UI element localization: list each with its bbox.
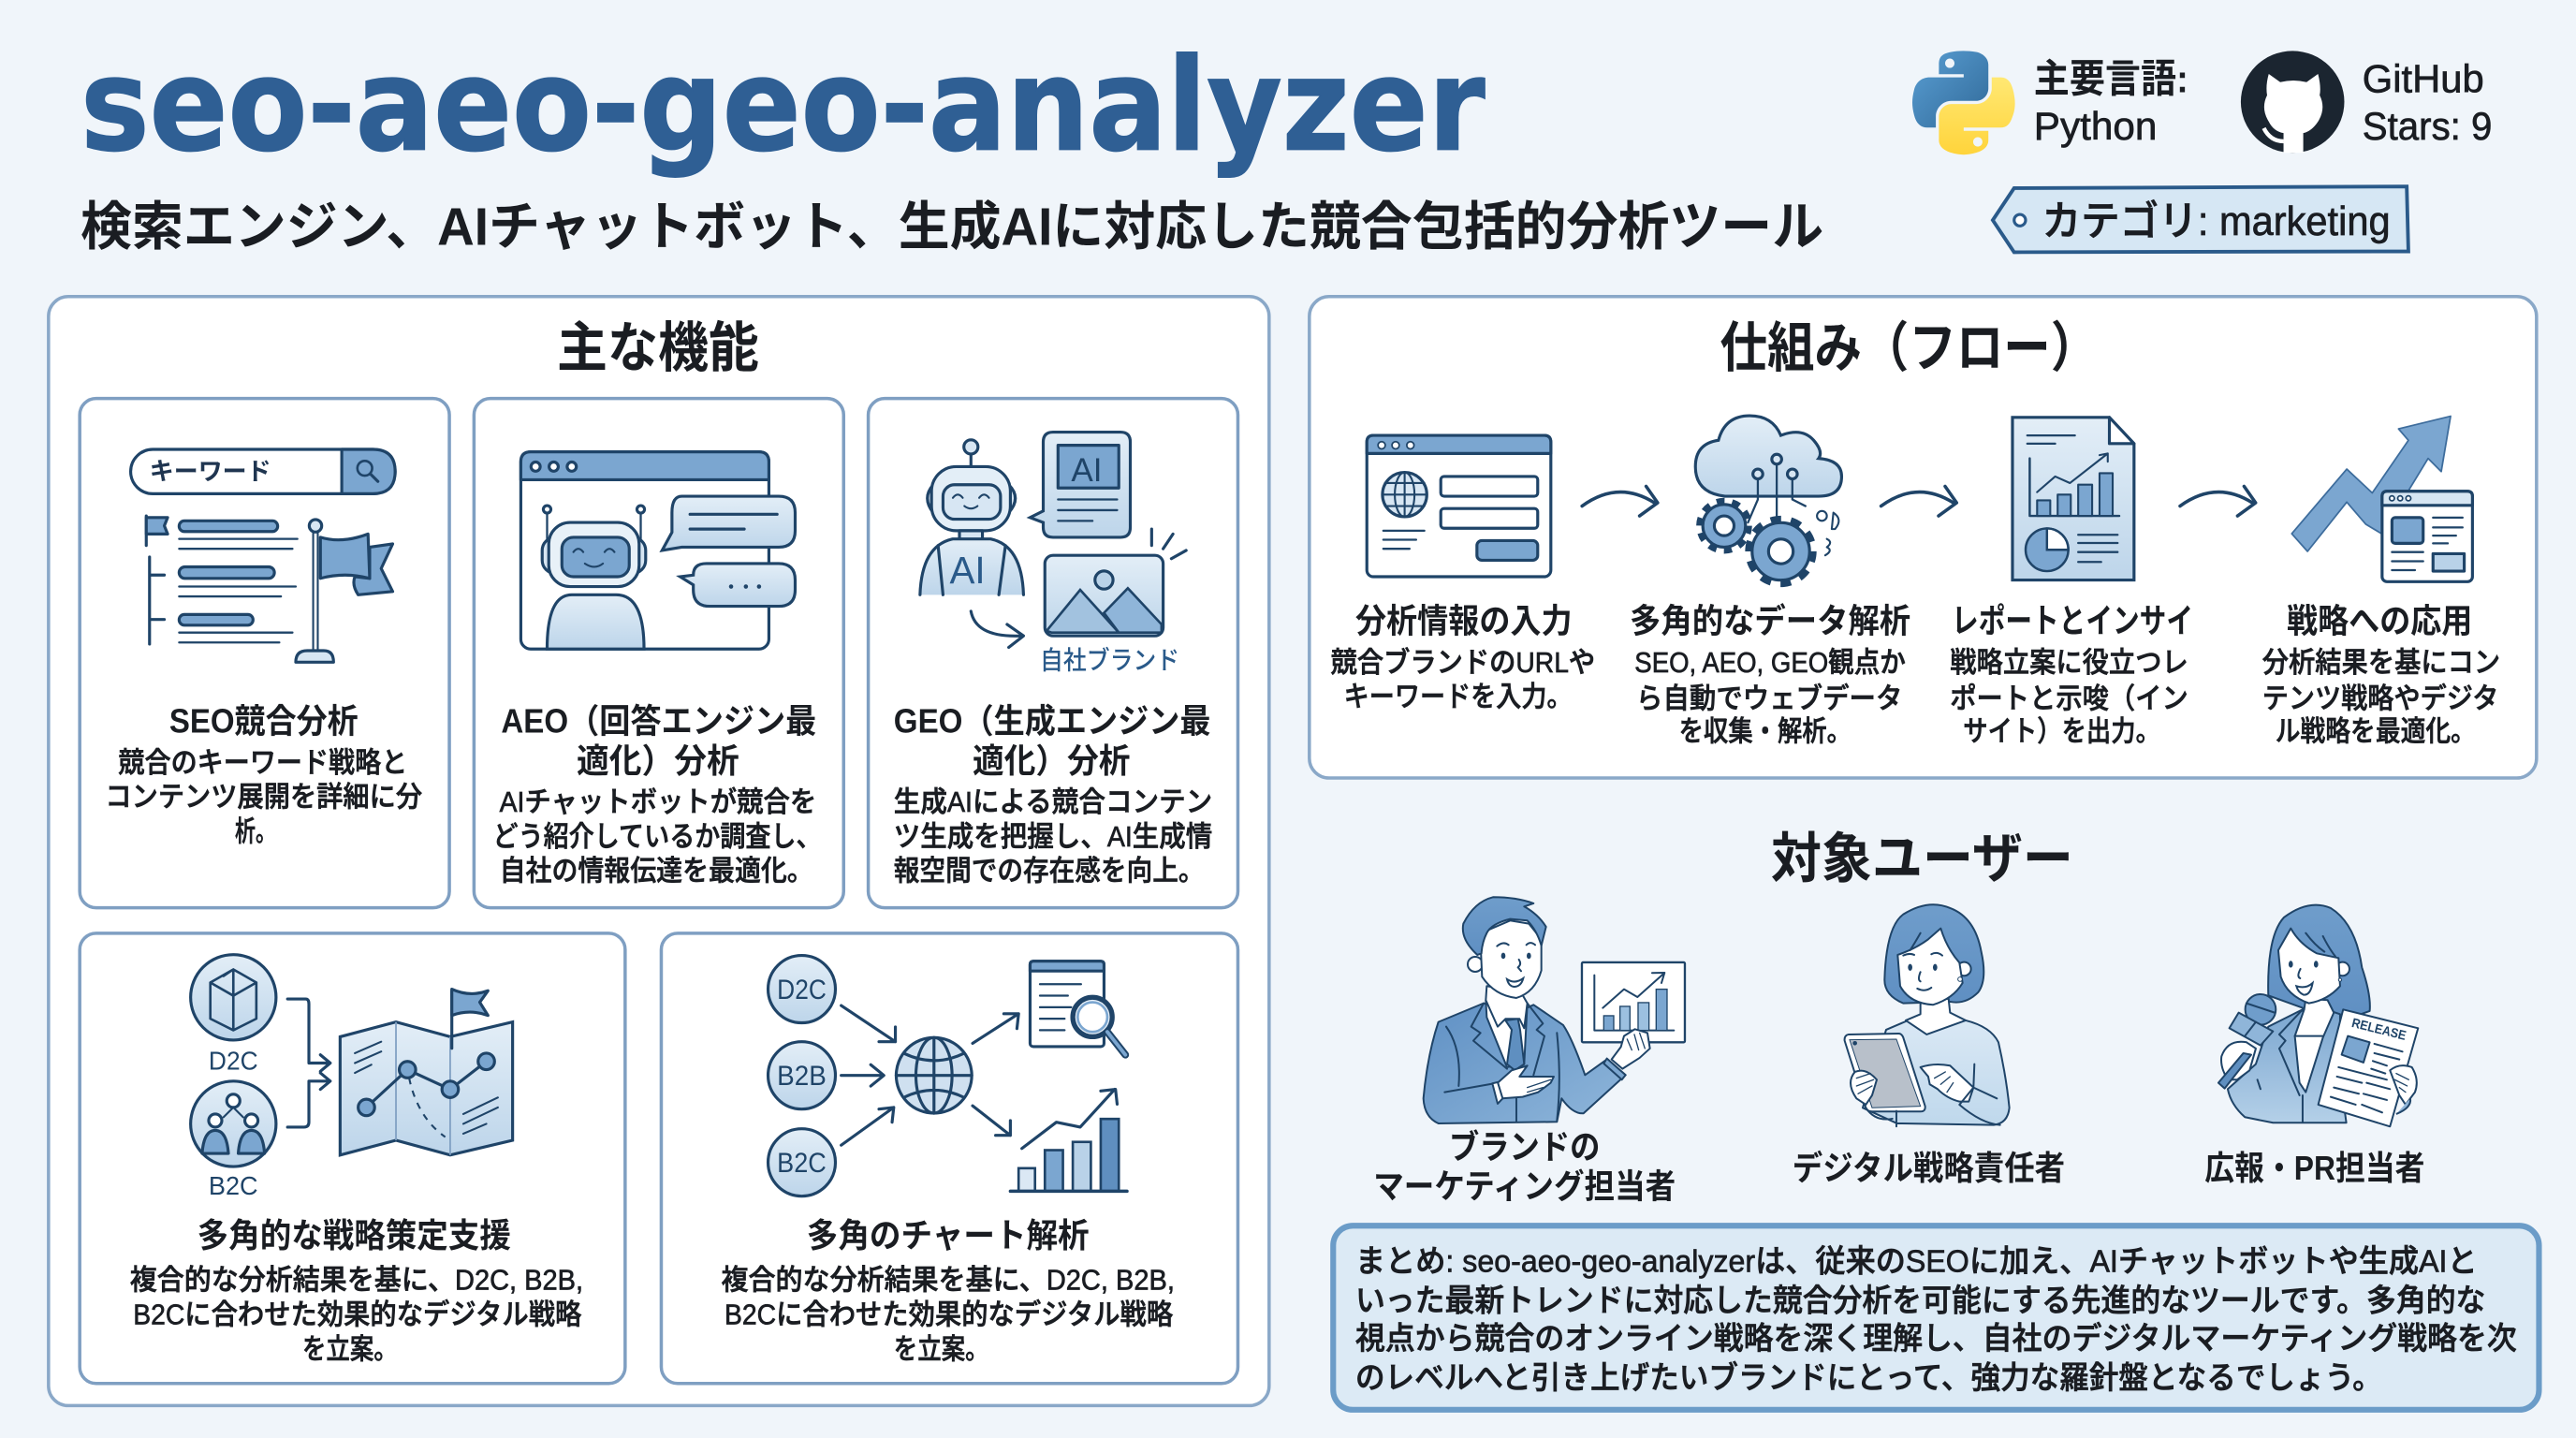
card title: [894, 702, 1211, 780]
card text: を立案。: [302, 1332, 398, 1365]
icon: pr woman with microphone and press release: RELEASE: [2350, 1015, 2408, 1043]
card: strategy: [80, 933, 625, 1384]
card: geo: [869, 399, 1237, 908]
step 1 text: 分析情報の入力: [1355, 602, 1573, 640]
icon: cloud data analysis: [1695, 416, 1841, 581]
icon: segments to globe to charts: B2C: [777, 1148, 827, 1179]
card title: [501, 702, 816, 780]
icon: generative ai robot and brand image: AI: [949, 549, 986, 592]
card text: 析。: [235, 815, 276, 848]
user label: marketer: [1373, 1127, 1676, 1205]
step 3 text: ポートと示唆（イン: [1950, 682, 2188, 714]
icon: digital strategy woman with tablet: [1845, 904, 2010, 1126]
category tag: カテゴリ: marketing: [2042, 198, 2391, 244]
category tag: [1993, 186, 2408, 252]
icon: segments to globe to charts: D2C: [777, 975, 827, 1005]
heading: flow: 仕組み（フロー）: [1720, 318, 2098, 378]
card title: 多角的な戦略策定支援: [198, 1216, 511, 1255]
card title: 適化）分析: [973, 741, 1131, 780]
card text: 自社の情報伝達を最適化。: [500, 855, 813, 888]
step 2 text: ら自動でウェブデータ: [1636, 682, 1902, 714]
icon: python logo: [1912, 51, 2015, 154]
user label: pr: 広報・PR担当者: [2204, 1149, 2424, 1187]
heading: target users: 対象ユーザー: [1771, 829, 2073, 889]
language label: Python: [2034, 104, 2157, 148]
card title: 多角のチャート解析: [807, 1216, 1090, 1255]
card title: 適化）分析: [577, 741, 739, 780]
step 1 text: 競合ブランドのURLや: [1331, 646, 1595, 679]
icon: generative ai robot and brand image: 自社ブランド: [1040, 645, 1179, 674]
summary callout: のレベルへと引き上げたいブランドにとって、強力な羅針盤となるでしょう。: [1355, 1361, 2382, 1396]
step 2 text: を収集・解析。: [1679, 715, 1852, 748]
card: seo: [80, 399, 449, 908]
card text: を立案。: [894, 1332, 989, 1365]
arrow: [1881, 486, 1956, 516]
heading: main features: 主な機能: [557, 318, 759, 378]
icon: keyword search and flags: [131, 449, 395, 662]
icon: chat robot in browser: [520, 452, 795, 649]
panel: how it works flow: [1310, 297, 2537, 778]
step 4 text: 分析結果を基にコン: [2262, 646, 2500, 679]
icon: github logo: [2241, 51, 2344, 153]
icon: keyword search and flags: キーワード: [150, 457, 271, 485]
icon: marketer man with chart: [1424, 897, 1685, 1123]
user label: marketer: マーケティング担当者: [1373, 1167, 1676, 1205]
card text: [130, 1264, 583, 1365]
icon: pr woman with microphone and press release: [2218, 905, 2418, 1126]
step 4 text: ル戦略を最適化。: [2276, 715, 2476, 748]
card text: 複合的な分析結果を基に、D2C, B2B,: [722, 1264, 1175, 1297]
card text: [722, 1264, 1175, 1365]
card text: 報空間での存在感を向上。: [894, 855, 1204, 888]
card text: [105, 746, 422, 848]
icon: report document: [2012, 418, 2134, 580]
title: seo-aeo-geo-analyzer: [80, 32, 1486, 181]
icon: generative ai robot and brand image: AI: [1071, 452, 1103, 489]
icon: growth arrow and page: [2291, 417, 2472, 581]
card text: どう紹介しているか調査し、: [493, 820, 822, 853]
arrow: [2180, 486, 2256, 516]
step 2 text: 多角的なデータ解析: [1630, 602, 1910, 640]
card title: SEO競合分析: [169, 702, 359, 741]
card text: コンテンツ展開を詳細に分: [105, 781, 422, 814]
step 3 text: [1950, 602, 2193, 748]
card: chart analysis: [661, 933, 1237, 1384]
summary callout: 視点から競合のオンライン戦略を深く理解し、自社のデジタルマーケティング戦略を次: [1355, 1322, 2517, 1357]
card text: 生成AIによる競合コンテン: [894, 785, 1212, 818]
github stars label: Stars: 9: [2363, 104, 2492, 148]
card text: ツ生成を把握し、AI生成情: [894, 820, 1212, 853]
card text: B2Cに合わせた効果的なデジタル戦略: [724, 1299, 1173, 1331]
card title: AEO（回答エンジン最: [501, 702, 816, 741]
step 4 text: 戦略への応用: [2287, 602, 2472, 640]
icon: input form browser: [1367, 435, 1551, 577]
step 3 text: 戦略立案に役立つレ: [1950, 646, 2188, 679]
user label: digital strategy lead: デジタル戦略責任者: [1793, 1149, 2065, 1187]
step 3 text: レポートとインサイ: [1952, 602, 2193, 640]
step 2 text: SEO, AEO, GEO観点か: [1634, 646, 1906, 679]
icon: segments to globe to charts: B2B: [777, 1061, 827, 1092]
card text: 競合のキーワード戦略と: [118, 746, 407, 779]
step 4 text: テンツ戦略やデジタ: [2262, 682, 2498, 714]
card title: GEO（生成エンジン最: [894, 702, 1211, 741]
arrow: [1582, 486, 1658, 516]
step 1 text: キーワードを入力。: [1344, 681, 1573, 713]
github stars label: [2363, 56, 2492, 148]
summary callout: [1333, 1225, 2539, 1410]
icon: segments to strategy map: [191, 955, 513, 1200]
icon: segments to globe to charts: [768, 956, 1127, 1196]
step 4 text: [2262, 602, 2500, 748]
card: aeo: [474, 399, 843, 908]
summary callout: いった最新トレンドに対応した競合分析を可能にする先進的なツールです。多角的な: [1355, 1284, 2485, 1319]
card text: [493, 785, 822, 888]
github stars label: GitHub: [2363, 56, 2484, 100]
icon: segments to strategy map: B2C: [209, 1171, 258, 1200]
step 2 text: [1630, 602, 1910, 748]
card text: 複合的な分析結果を基に、D2C, B2B,: [130, 1264, 583, 1297]
icon: generative ai robot and brand image: [920, 433, 1186, 674]
icon: segments to strategy map: D2C: [209, 1047, 258, 1076]
subtitle: 検索エンジン、AIチャットボット、生成AIに対応した競合包括的分析ツール: [80, 197, 1823, 256]
panel: main features: [49, 297, 1269, 1405]
language label: [2034, 56, 2188, 148]
language label: 主要言語:: [2034, 56, 2188, 100]
step 3 text: サイト）を出力。: [1963, 715, 2160, 748]
user label: marketer: ブランドの: [1449, 1127, 1600, 1166]
step 1 text: [1331, 602, 1595, 713]
card text: AIチャットボットが競合を: [500, 785, 816, 818]
summary callout: まとめ: seo-aeo-geo-analyzerは、従来のSEOに加え、AIチャットボットや生成AIと: [1355, 1244, 2478, 1279]
card text: B2Cに合わせた効果的なデジタル戦略: [133, 1299, 582, 1331]
card text: [894, 785, 1212, 888]
